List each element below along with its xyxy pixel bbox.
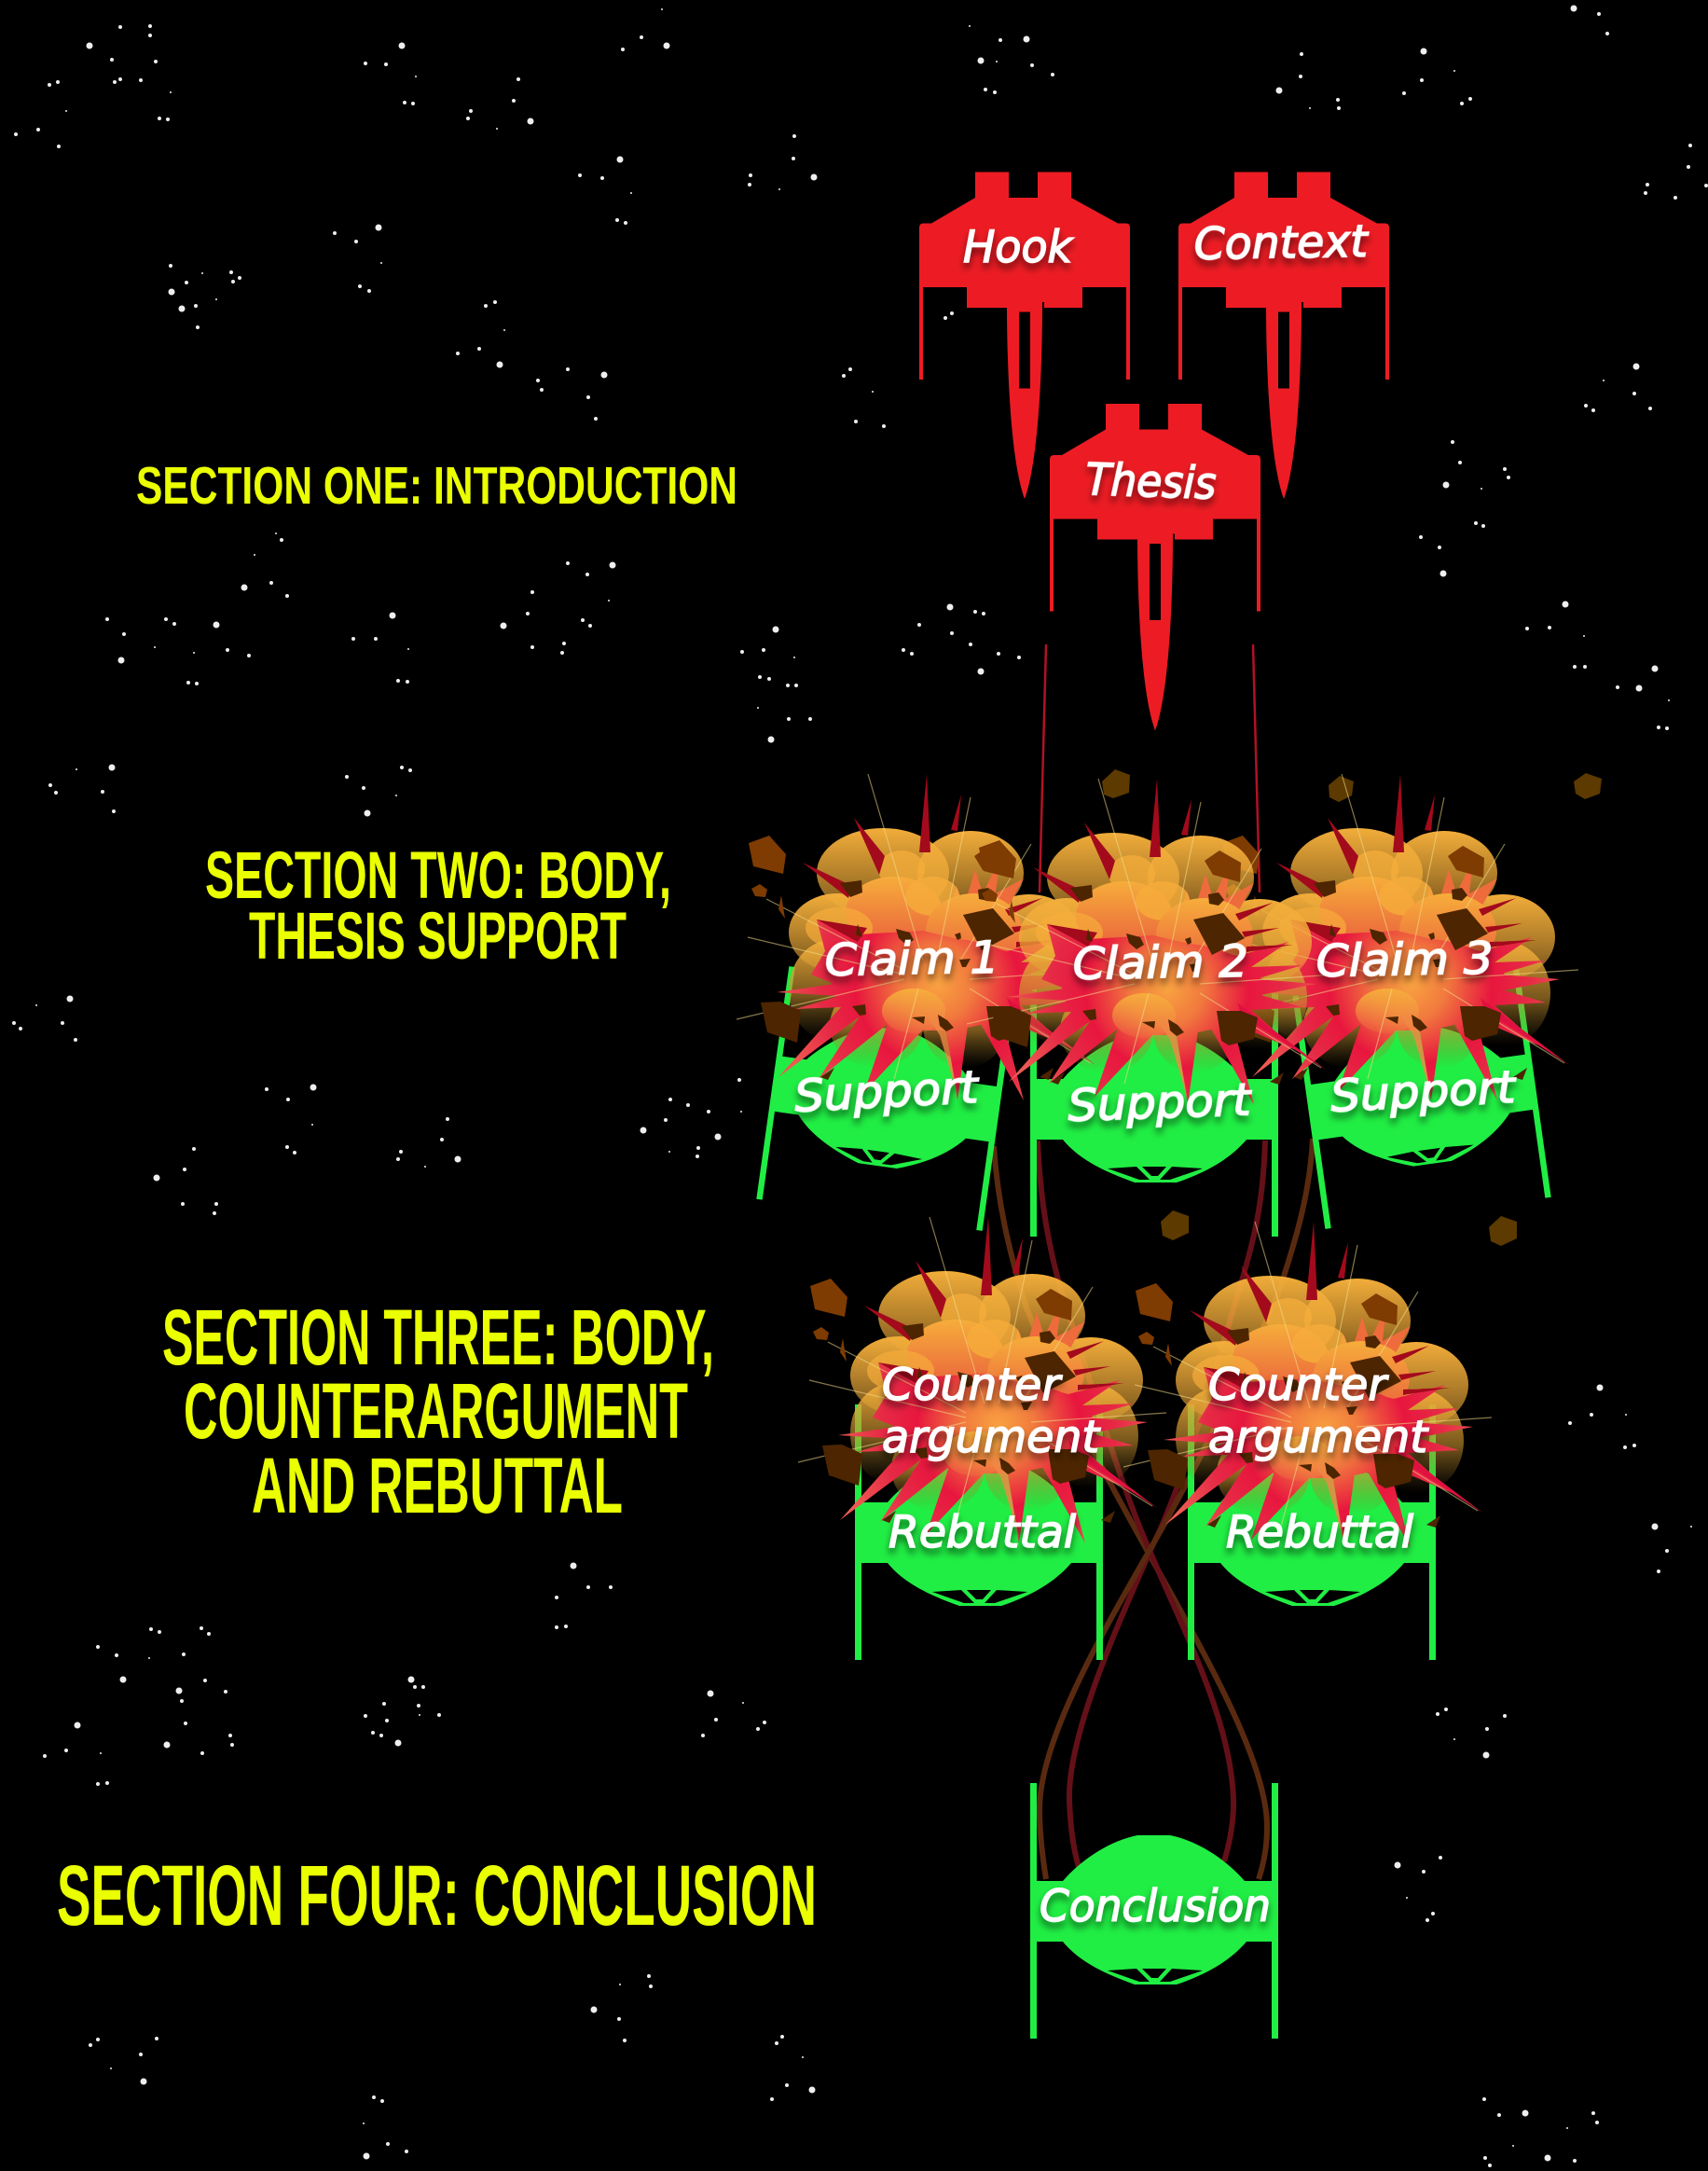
red ship: Context	[1178, 172, 1389, 499]
explosion: claim 1	[737, 774, 1105, 1100]
heading: section three	[162, 1293, 714, 1529]
label: Support 3: Support	[1329, 1062, 1518, 1123]
green ship: support 2	[1030, 981, 1278, 1237]
connector curves to conclusion	[994, 1139, 1313, 1879]
red ship: Thesis	[1050, 404, 1260, 731]
heading: section three: COUNTERARGUMENT	[184, 1367, 688, 1455]
green ship: support 1	[756, 966, 1015, 1231]
explosion: claim 3	[1210, 774, 1578, 1100]
label: Claim 2: Claim 2	[1072, 936, 1248, 990]
heading: section two	[205, 839, 671, 974]
label: Claim 3: Claim 3	[1315, 933, 1494, 988]
green ship: rebuttal 2	[1188, 1404, 1436, 1660]
label: Rebuttal 2: Rebuttal	[1226, 1507, 1413, 1558]
label: Context: Context	[1193, 216, 1370, 270]
label: Claim 1: Claim 1	[824, 933, 999, 987]
red ship: Hook	[919, 172, 1130, 499]
label: Counter argument 1	[882, 1360, 1101, 1463]
label: Support 2: Support	[1067, 1074, 1253, 1132]
explosion: counterargument 1	[798, 1217, 1166, 1543]
heading: section three: SECTION THREE: BODY,	[162, 1293, 714, 1381]
label: Rebuttal 1: Rebuttal	[888, 1507, 1076, 1558]
label: Counter argument 2: argument	[1208, 1412, 1429, 1463]
heading: section two: SECTION TWO: BODY,	[205, 839, 671, 913]
label: Counter argument 2: Counter	[1208, 1360, 1389, 1411]
heading: section three: AND REBUTTAL	[252, 1442, 623, 1529]
label: Thesis: Thesis	[1085, 454, 1217, 510]
label: Counter argument 1: argument	[882, 1412, 1101, 1463]
green ship: rebuttal 1	[855, 1404, 1103, 1660]
label: Support 1: Support	[793, 1062, 981, 1123]
explosion: counterargument 2	[1123, 1222, 1492, 1548]
laser lines from thesis	[1040, 644, 1260, 892]
label: Hook: Hook	[963, 222, 1074, 273]
label: Counter argument 1: Counter	[882, 1360, 1063, 1411]
label: Counter argument 2	[1208, 1360, 1429, 1463]
distant rocks	[1102, 769, 1602, 1246]
green ship: support 3	[1292, 964, 1551, 1229]
label: Conclusion: Conclusion	[1040, 1881, 1271, 1932]
green ship: conclusion	[1030, 1783, 1278, 2039]
heading: section two: THESIS SUPPORT	[249, 900, 627, 974]
explosion: claim 2	[967, 779, 1335, 1105]
heading: section one: SECTION ONE: INTRODUCTION	[136, 456, 737, 516]
heading: section four: SECTION FOUR: CONCLUSION	[57, 1848, 817, 1943]
